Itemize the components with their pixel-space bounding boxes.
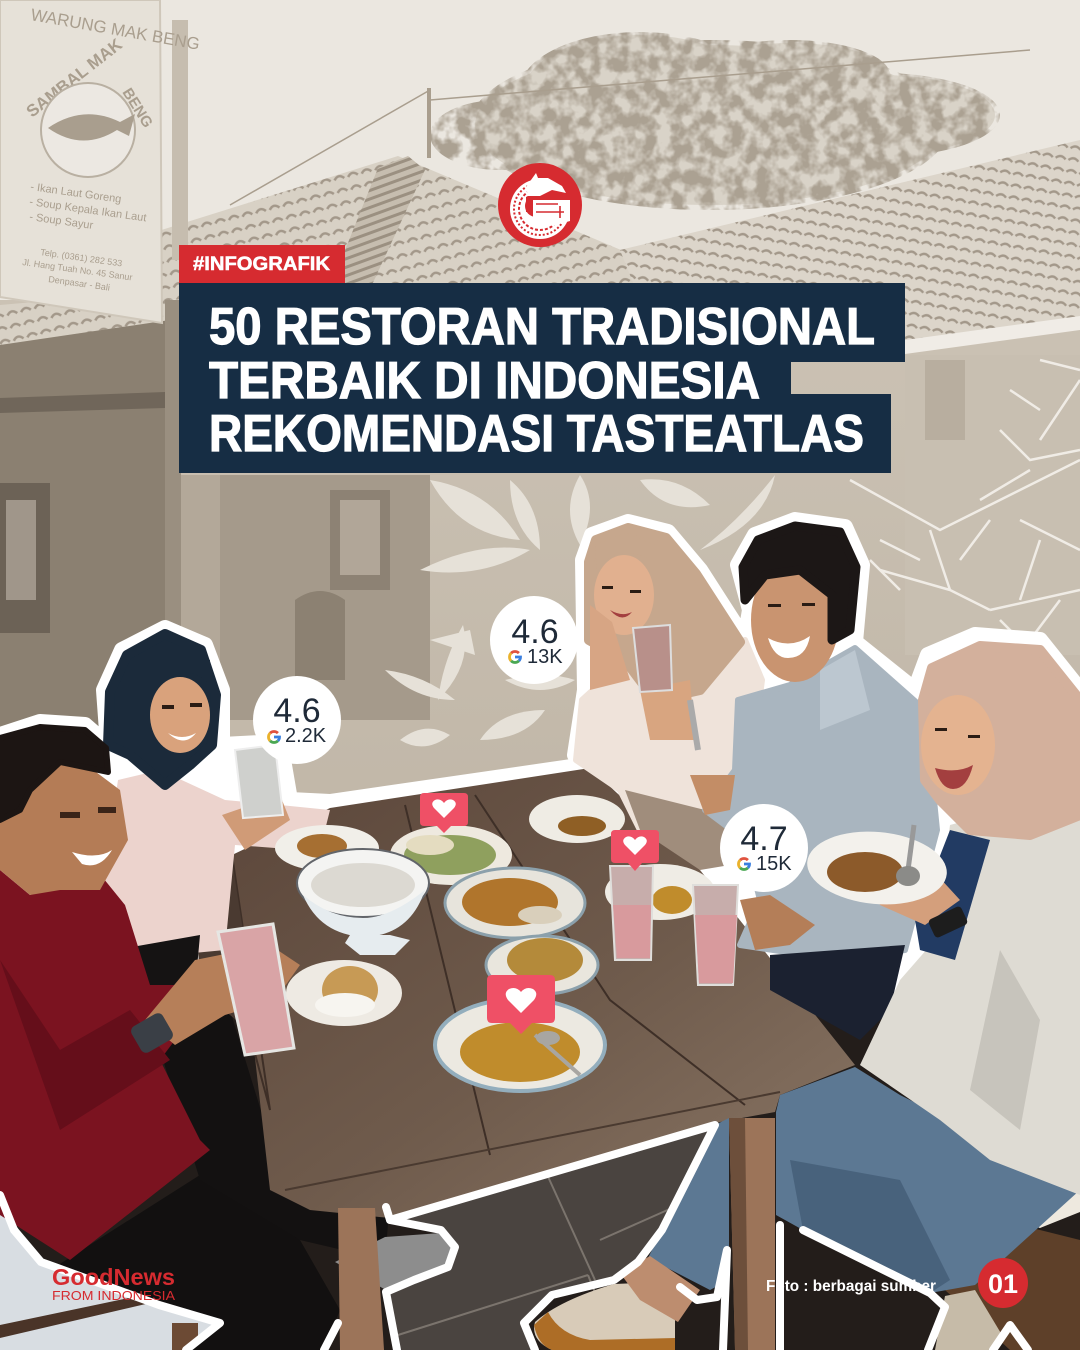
woman in dusty-pink hijab — [648, 646, 1080, 1293]
plate in her hand — [804, 826, 950, 910]
woman in beige hijab — [576, 528, 762, 870]
tree canopy soft base — [475, 35, 995, 205]
floor tiles — [386, 1125, 715, 1350]
sneaker and orange sole — [534, 1283, 675, 1350]
right wall — [905, 355, 1080, 655]
hanging restaurant sign: SAMBAL MAK — [23, 34, 126, 121]
colander — [297, 849, 429, 917]
heart badge small left — [420, 793, 468, 833]
pale branches on the right — [850, 360, 1080, 660]
hanging restaurant sign: Telp. (0361) 282 533 — [40, 247, 123, 268]
left roof — [155, 156, 640, 300]
table legs in front of the jeans — [338, 1208, 384, 1350]
power line and pole — [230, 50, 1030, 205]
title block — [179, 283, 905, 473]
table top — [232, 768, 855, 1218]
hashtag label: #INFOGRAFIK — [193, 254, 330, 275]
hanging restaurant sign: BENG — [119, 85, 156, 131]
wood bench right — [900, 1195, 1080, 1350]
brand wordmark: GoodNews — [52, 1264, 175, 1290]
page number: 01 — [988, 1269, 1018, 1299]
hanging restaurant sign: Denpasar - Bali — [48, 274, 111, 293]
heart badge large — [487, 975, 555, 1034]
title block: 50 RESTORAN TRADISIONAL — [209, 298, 875, 356]
woman in navy hijab — [100, 634, 330, 1000]
white cutout lines over the floor — [0, 1125, 1028, 1350]
white cutout outline — [0, 520, 1080, 1350]
far right shoe — [935, 1290, 1002, 1350]
brand wordmark — [52, 1264, 175, 1303]
plates and food on the table — [275, 795, 738, 1091]
white chair bottom left — [0, 1200, 220, 1350]
black trousers of the man — [55, 1175, 340, 1350]
tree canopy speckled foliage — [430, 32, 1000, 210]
hanging restaurant sign: - Ikan Laut Goreng — [30, 181, 122, 206]
logo badge — [498, 163, 582, 247]
brand wordmark: FROM INDONESIA — [52, 1288, 175, 1303]
hanging restaurant sign: - Soup Kepala Ikan Laut — [29, 196, 147, 224]
left lower roof — [0, 290, 170, 345]
foreground photo cutout: diners around the table — [0, 520, 1080, 1350]
rating badge: 4.6, 2.2K: 4.6 — [273, 692, 321, 730]
page number — [978, 1258, 1028, 1308]
central wall and window — [220, 475, 430, 720]
rating badge: 4.7, 15K: 15K — [756, 853, 792, 875]
man in maroon shirt — [0, 727, 300, 1260]
rating badge: 4.7, 15K: 4.7 — [740, 820, 788, 858]
pale plant leaves — [385, 475, 775, 746]
rating badge: 4.6, 2.2K — [253, 676, 341, 764]
left dark building — [0, 320, 170, 740]
rating badge: 4.7, 15K — [720, 804, 808, 892]
hanging restaurant sign — [0, 0, 201, 323]
jeans left leg — [648, 1118, 729, 1290]
jeans behind the table — [776, 1067, 1080, 1293]
rating badge: 4.6, 13K — [490, 596, 578, 684]
hanging restaurant sign: - Soup Sayur — [29, 211, 94, 232]
pink drink held by the man — [218, 924, 294, 1055]
title block: TERBAIK DI INDONESIA — [209, 352, 760, 410]
photo credit: Foto : berbagai sumber — [766, 1278, 936, 1295]
rating badge: 4.6, 13K: 13K — [527, 646, 563, 668]
hashtag label — [179, 245, 345, 283]
jacket — [860, 790, 1080, 1195]
pink drink glasses — [610, 866, 653, 960]
title block: REKOMENDASI TASTEATLAS — [209, 405, 864, 463]
man in grey shirt — [690, 526, 937, 1040]
heart badge small right — [611, 830, 659, 871]
hanging restaurant sign: WARUNG MAK BENG — [29, 5, 201, 54]
rating badge: 4.6, 2.2K: 2.2K — [285, 725, 327, 747]
rating badge: 4.6, 13K: 4.6 — [511, 613, 559, 651]
right roof — [620, 140, 1080, 345]
dark floor base — [0, 1000, 1080, 1350]
glass held by navy hijab woman — [235, 745, 283, 818]
sneaker left — [335, 1233, 453, 1290]
lower wall tone — [0, 300, 1080, 1350]
hanging restaurant sign: Jl. Hang Tuah No. 45 Sanur — [22, 257, 133, 282]
